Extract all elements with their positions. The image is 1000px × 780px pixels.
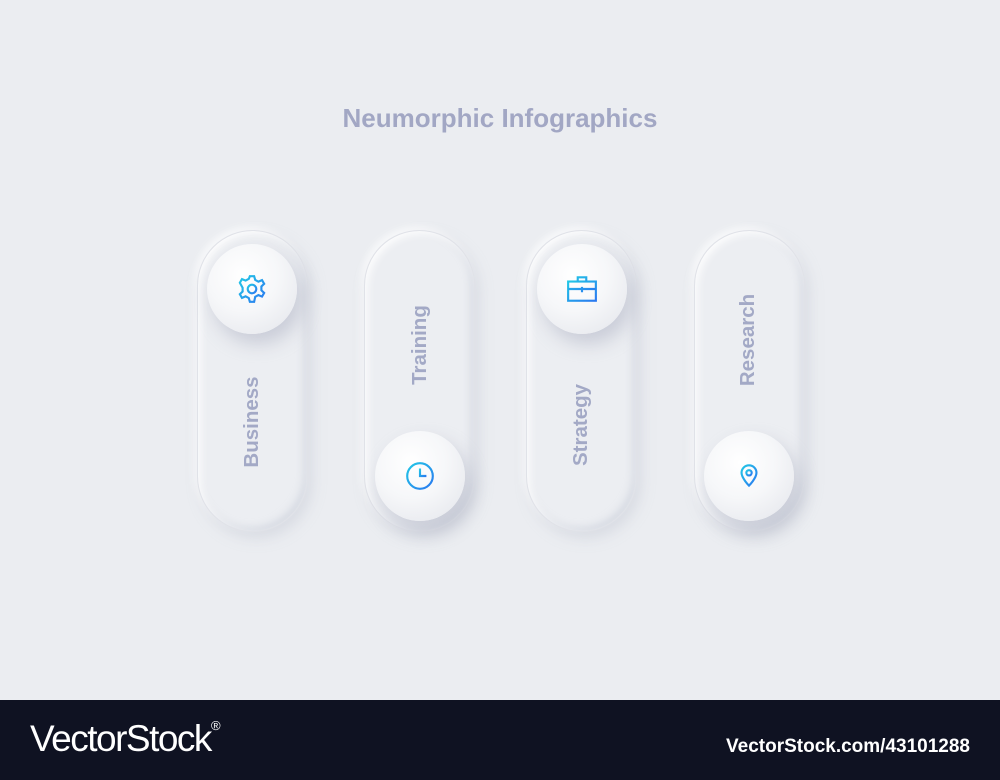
title: Neumorphic Infographics — [343, 103, 657, 133]
panel: training — [364, 230, 475, 532]
icon: briefcase ball — [537, 244, 627, 334]
footer logo: VectorStock® — [30, 718, 219, 759]
label: training: Training — [408, 305, 431, 385]
label: research: Research — [736, 294, 759, 386]
footer — [0, 700, 1000, 780]
panel: strategy — [526, 230, 637, 532]
icon: location ball — [704, 431, 794, 521]
panel: research — [694, 230, 805, 532]
panel: business — [197, 230, 308, 532]
label: business: Business — [240, 376, 263, 468]
icon: gear ball — [207, 244, 297, 334]
icon: clock ball — [375, 431, 465, 521]
footer url: VectorStock.com/43101288 — [726, 736, 970, 757]
label: strategy: Strategy — [569, 384, 592, 466]
